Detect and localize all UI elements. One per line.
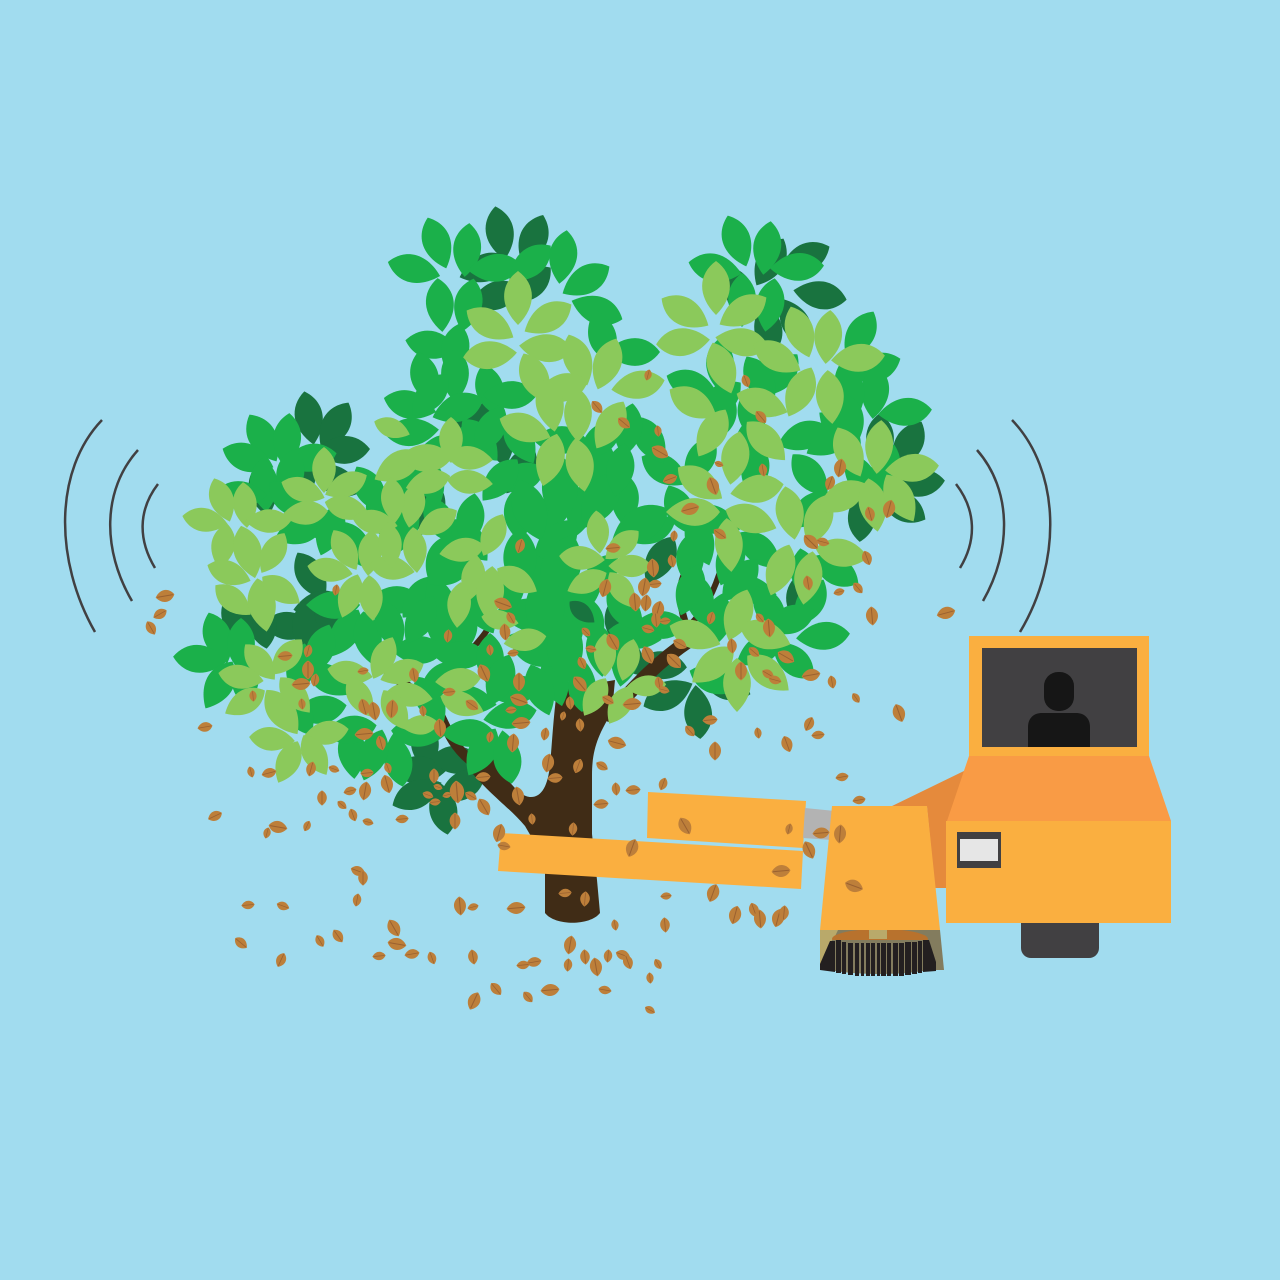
underside highlight bbox=[820, 930, 838, 968]
gauge panel bbox=[957, 832, 1001, 868]
rear arm bbox=[890, 770, 966, 888]
cutter head hood bbox=[820, 806, 940, 930]
tree trunk and branches bbox=[345, 545, 722, 923]
sound waves: left bbox=[65, 420, 158, 632]
cutter head underside bbox=[820, 930, 944, 970]
stump top bbox=[832, 929, 928, 949]
gauge display bbox=[960, 839, 998, 861]
operator silhouette bbox=[1028, 672, 1090, 747]
foliage: light green front leaves bbox=[180, 261, 940, 788]
trunk bbox=[467, 680, 615, 923]
cab frame bbox=[969, 636, 1149, 757]
falling brown leaves bbox=[143, 369, 957, 1016]
branches bbox=[345, 545, 722, 760]
body base bbox=[946, 821, 1171, 923]
cab screen bbox=[982, 648, 1137, 747]
foliage: bright green middle leaves bbox=[172, 211, 933, 789]
body sloped top bbox=[947, 756, 1171, 821]
connector bbox=[803, 808, 835, 840]
sound waves: right bbox=[956, 420, 1050, 632]
wheel bbox=[1021, 900, 1099, 958]
wood planks bbox=[498, 792, 806, 889]
tab bbox=[869, 930, 887, 939]
grinding blades bbox=[820, 940, 937, 976]
wood chipper machine bbox=[803, 636, 1171, 976]
foliage: dark green back leaves bbox=[212, 204, 946, 837]
